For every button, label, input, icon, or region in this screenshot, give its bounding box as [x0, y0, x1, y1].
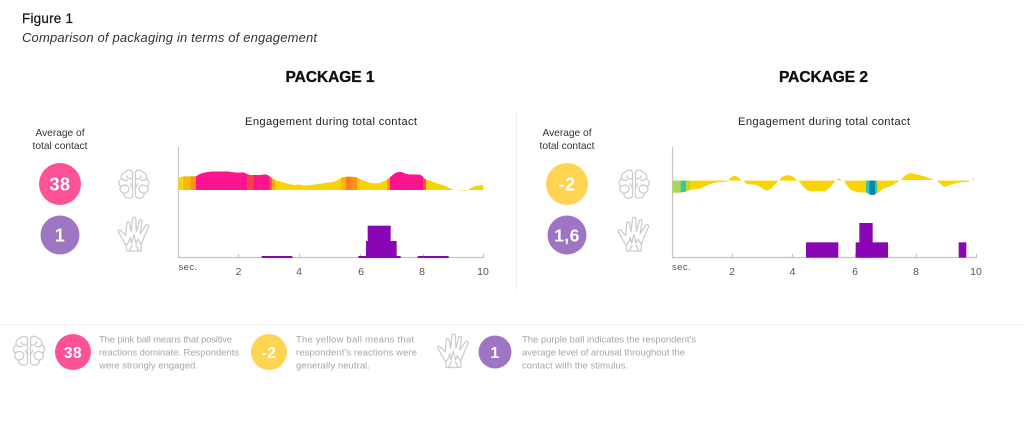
package 1 title: PACKAGE 1 [286, 69, 375, 86]
chart: package 1 engagement [177, 147, 489, 278]
axis labels: 10 [970, 266, 982, 278]
legend pink text: The pink ball means that positive [99, 334, 232, 346]
legend separator [0, 324, 1024, 325]
legend pink ball [55, 334, 91, 370]
package 2 average label: total contact [540, 141, 595, 152]
package 1 average label: total contact [33, 141, 88, 152]
purple ball 1: 1 [55, 226, 65, 246]
package 2 average label: Average of [542, 128, 592, 139]
legend purple text: average level of arousal throughout the [522, 348, 685, 358]
legend yellow ball: -2 [262, 345, 276, 362]
purple ball 1,6: 1,6 [554, 226, 580, 246]
legend yellow text: generally neutral. [296, 360, 370, 372]
panel: package 1 [33, 69, 489, 278]
legend purple text: The purple ball indicates the respondent's [522, 334, 696, 346]
legend purple text [522, 334, 696, 372]
axis labels [672, 262, 982, 278]
panel: package 2 [540, 69, 982, 278]
legend yellow text [296, 334, 417, 372]
arousal bars [806, 223, 966, 258]
chart: package 2 engagement [670, 147, 982, 278]
figure heading [22, 11, 318, 45]
panel: legend [13, 334, 696, 372]
legend purple text: contact with the stimulus. [522, 360, 628, 372]
axis labels: sec. [672, 262, 691, 273]
legend yellow ball [251, 334, 287, 370]
icon: hand [618, 217, 649, 251]
axis labels: sec. [178, 262, 198, 273]
chart heading: Engagement during total contact [738, 116, 911, 128]
axis labels [178, 262, 489, 278]
divider between packages [516, 112, 517, 290]
purple ball 1 [40, 216, 80, 254]
yellow ball -2: -2 [558, 174, 576, 194]
legend yellow text: The yellow ball means that [296, 334, 414, 346]
package 1 average label [33, 128, 88, 152]
axis labels: 2 [236, 266, 242, 278]
axis labels: 10 [477, 266, 489, 278]
legend icon: brain [13, 336, 45, 365]
package 2 title: PACKAGE 2 [779, 69, 868, 86]
axis labels: 2 [729, 266, 735, 278]
yellow ball -2 [546, 163, 588, 205]
axes [178, 147, 484, 258]
legend pink text: reactions dominate. Respondents [99, 348, 239, 358]
arousal bars [262, 226, 449, 258]
package 2 average label [540, 128, 595, 152]
purple ball 1,6 [548, 216, 586, 254]
legend yellow text: respondent's reactions were [296, 348, 417, 358]
axis labels: 8 [419, 266, 425, 278]
figure heading: Comparison of packaging in terms of engagement [22, 30, 318, 45]
icon: hand [118, 217, 149, 251]
chart heading: Engagement during total contact [245, 116, 418, 128]
engagement area [672, 173, 974, 195]
icon: brain [119, 170, 149, 198]
legend icon: hand [438, 334, 468, 367]
axes [672, 147, 976, 258]
axis labels: 4 [296, 266, 302, 278]
figure heading: Figure 1 [22, 11, 73, 26]
legend purple ball [478, 336, 512, 368]
legend purple ball: 1 [490, 345, 500, 362]
legend pink ball: 38 [64, 345, 82, 362]
pink ball 38 [39, 163, 81, 205]
legend pink text: were strongly engaged. [98, 360, 198, 372]
axis labels: 6 [358, 266, 364, 278]
package 1 average label: Average of [35, 128, 85, 139]
engagement area [178, 171, 484, 191]
icon: brain [619, 170, 649, 198]
axis labels: 4 [790, 266, 796, 278]
axis labels: 8 [913, 266, 919, 278]
legend pink text [98, 334, 239, 372]
pink ball 38: 38 [49, 174, 71, 194]
axis labels: 6 [852, 266, 858, 278]
